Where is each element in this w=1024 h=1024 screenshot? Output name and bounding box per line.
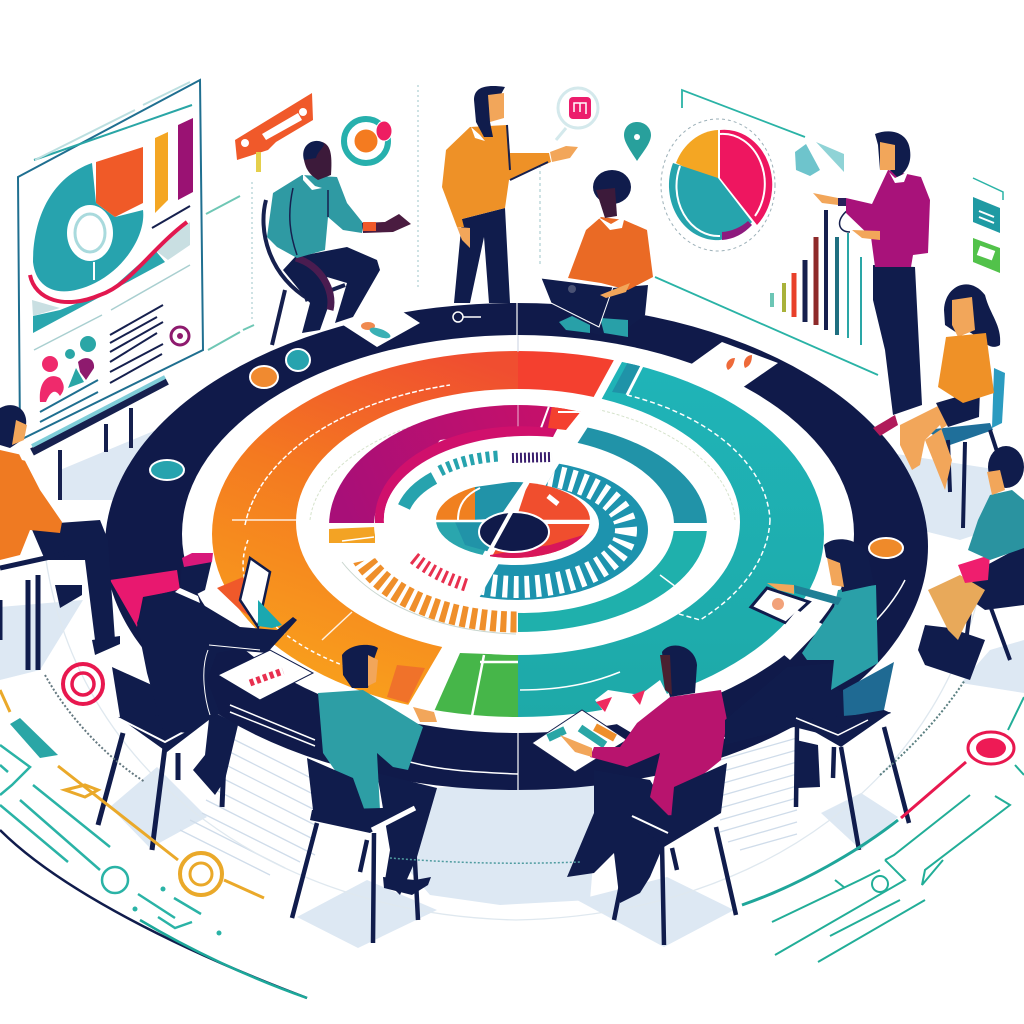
- circuit lines: [772, 697, 1024, 962]
- head: [593, 170, 631, 204]
- hand: [560, 735, 592, 757]
- top: [802, 585, 878, 690]
- table top: [105, 303, 928, 790]
- ring band with ticks: [480, 464, 648, 600]
- collar: [175, 588, 200, 603]
- white inner field: [296, 389, 740, 655]
- board people icons: [40, 336, 96, 402]
- inner white ellipse: [374, 437, 674, 613]
- hand: [413, 707, 437, 722]
- collar: [598, 216, 625, 230]
- table items: [150, 303, 903, 790]
- background dashed guides: [206, 85, 540, 350]
- head: [180, 560, 212, 595]
- red line: [901, 762, 966, 818]
- icon: map pin: [624, 122, 651, 161]
- chair: [614, 763, 736, 945]
- centre seam: [517, 303, 518, 790]
- icon: teal oval: [150, 460, 184, 480]
- circuit lines: [0, 745, 201, 928]
- side cards: [973, 178, 1003, 273]
- legs: [30, 520, 115, 640]
- trousers: [454, 208, 510, 303]
- outer ring segments: [212, 351, 824, 717]
- book: [387, 665, 425, 703]
- chair: [794, 662, 909, 850]
- skirt: [958, 555, 990, 583]
- top: [938, 333, 994, 403]
- white line in band: [385, 439, 552, 523]
- icon: speech bubble: [556, 88, 598, 140]
- arm lines: [290, 188, 328, 255]
- board bars: [155, 118, 193, 213]
- chair: [263, 200, 345, 345]
- sweater: [442, 125, 551, 227]
- head: [0, 405, 26, 448]
- round table: [105, 303, 928, 790]
- head: [662, 646, 697, 697]
- white sheet: [770, 610, 824, 660]
- papers: [595, 680, 670, 735]
- table rim lines: [230, 580, 905, 774]
- hands: [457, 146, 578, 248]
- chair: [98, 667, 225, 850]
- person: front man teal jacket: [292, 645, 437, 943]
- amber target: [180, 853, 222, 895]
- tick outline: [342, 562, 516, 634]
- paper with stripes: [218, 650, 313, 700]
- head: [474, 86, 505, 137]
- tablet: [532, 710, 627, 772]
- laptop: [541, 278, 613, 327]
- left presentation board: [18, 80, 203, 500]
- right floor graphics: [390, 680, 1024, 962]
- trousers: [377, 773, 437, 895]
- chair: [965, 600, 1010, 660]
- board lower swoosh: [32, 222, 190, 333]
- floor shadows: [0, 420, 1024, 948]
- left stub bars: [329, 527, 418, 543]
- hand: [600, 283, 630, 298]
- icon: orange tag: [235, 93, 313, 172]
- collar: [303, 174, 322, 190]
- device screen: [258, 600, 282, 628]
- floor stripes: [46, 560, 986, 920]
- white note on table: [690, 342, 778, 388]
- teal arc left: [404, 478, 434, 507]
- field dashes: [310, 410, 735, 520]
- center pie: [436, 482, 590, 558]
- sweater: [590, 690, 727, 817]
- tablet: [240, 558, 270, 627]
- head: [342, 645, 378, 688]
- magenta band: [329, 405, 580, 523]
- trousers: [725, 663, 891, 745]
- hand: [362, 214, 411, 233]
- hair: [824, 539, 874, 592]
- chair: [925, 368, 1005, 528]
- person: front left man dark suit: [98, 553, 313, 850]
- head: [988, 446, 1024, 488]
- slash between magenta and teal: [572, 412, 594, 446]
- person: standing man orange sweater: [442, 86, 578, 303]
- jacket: [318, 690, 423, 817]
- jacket: [968, 490, 1024, 560]
- amber node: [65, 785, 98, 797]
- magenta table panel: [110, 570, 180, 627]
- sweater: [846, 170, 930, 267]
- arm: [794, 585, 842, 605]
- face: [827, 558, 844, 587]
- icon: teal chip: [286, 349, 310, 371]
- leg and boot: [193, 710, 238, 795]
- orange ticks: [353, 558, 517, 632]
- collar: [471, 127, 485, 141]
- person: seated woman orange top: [900, 284, 1005, 528]
- skirt: [936, 390, 980, 427]
- collar: [889, 172, 908, 183]
- person: seated woman with laptop: [541, 170, 653, 337]
- paper on table: [343, 310, 420, 347]
- legs: [560, 285, 648, 335]
- face: [952, 297, 975, 337]
- right presentation board: [655, 90, 878, 375]
- board bar chart: [772, 210, 861, 345]
- dots: [132, 886, 222, 936]
- amber line: [58, 766, 264, 898]
- pink thin band: [375, 426, 555, 523]
- shoes: [55, 585, 120, 655]
- legs: [283, 247, 380, 333]
- person: seated man teal shirt: [263, 141, 411, 345]
- board pie chart: [661, 119, 775, 251]
- hat: [182, 553, 213, 567]
- board stand: [32, 377, 167, 500]
- inner white: [431, 483, 599, 565]
- bottom dotted trail: [390, 858, 580, 863]
- outer sweep line: [0, 830, 307, 998]
- board pie chart: [33, 147, 143, 291]
- paper colours: [596, 690, 645, 712]
- tablet: [751, 588, 809, 623]
- suit: [137, 590, 297, 733]
- dotted trail: [880, 680, 965, 775]
- icon: ring chart: [344, 119, 392, 163]
- chair: [0, 550, 82, 670]
- orange circle: [869, 538, 903, 558]
- person: far right seated woman: [918, 446, 1024, 680]
- key icon: [453, 312, 481, 322]
- teal pill: [10, 718, 58, 758]
- feet: [559, 316, 628, 337]
- dotted trail: [45, 675, 145, 782]
- shirt: [568, 217, 653, 290]
- collar: [15, 445, 30, 462]
- bag: [918, 625, 985, 680]
- trousers: [873, 265, 922, 415]
- icon: orange chip: [250, 366, 278, 388]
- head: [304, 142, 331, 180]
- boot: [796, 740, 820, 788]
- person: front man magenta sweater: [532, 646, 736, 945]
- left floor graphics: [0, 664, 307, 998]
- shoe: [873, 415, 898, 436]
- shading: [507, 125, 548, 180]
- head: [875, 131, 910, 178]
- table white inlay: [182, 335, 854, 733]
- jacket: [0, 450, 62, 560]
- board polygon accent: [795, 142, 844, 176]
- legs: [900, 405, 955, 490]
- sweep teal end: [140, 920, 307, 998]
- small tick marks: [414, 456, 552, 585]
- person: standing man magenta sweater: [813, 131, 930, 436]
- shoe: [383, 877, 431, 895]
- shirt: [267, 175, 363, 258]
- red target: [63, 664, 103, 704]
- person: left seated man orange jacket: [0, 405, 120, 670]
- trousers: [567, 770, 674, 903]
- board cable: [840, 210, 850, 232]
- leg: [928, 575, 985, 640]
- teal band upper: [518, 428, 707, 632]
- hair: [944, 284, 1000, 347]
- board text lines: [34, 82, 192, 422]
- chair: [292, 758, 418, 943]
- suit lines: [204, 645, 260, 715]
- teal long line: [742, 820, 898, 905]
- red node: [968, 732, 1014, 764]
- hand: [767, 583, 794, 594]
- orange paper: [217, 577, 260, 623]
- person: front right woman teal top: [725, 539, 909, 850]
- hands: [813, 193, 880, 240]
- board swoosh: [30, 222, 187, 302]
- outer ring slashes: [232, 335, 770, 720]
